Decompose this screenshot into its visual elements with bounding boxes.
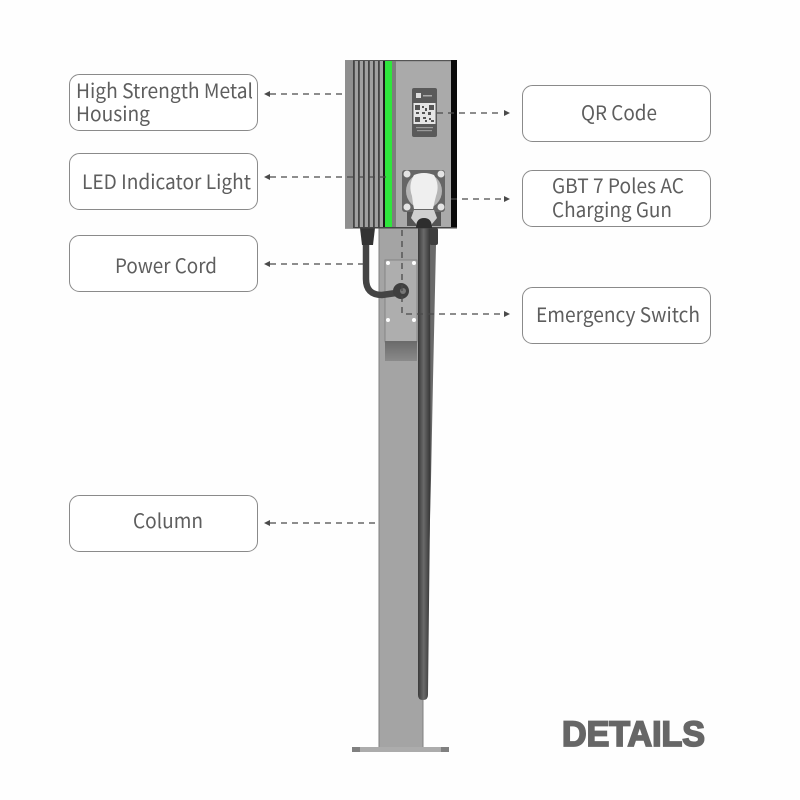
power cord: [360, 228, 409, 299]
charging cable: [418, 228, 438, 700]
label: QR code: QR Code: [581, 97, 657, 126]
charging socket: [402, 170, 445, 228]
label: emergency switch: [522, 288, 710, 344]
label: LED indicator light: LED Indicator Light: [82, 166, 251, 195]
label: GBT 7 poles AC charging gun: Charging Gun: [552, 194, 672, 223]
label: column: [70, 496, 258, 552]
label: GBT 7 poles AC charging gun: GBT 7 Poles AC: [552, 170, 684, 199]
label: emergency switch: Emergency Switch: [536, 299, 700, 328]
black side strip: [451, 60, 457, 227]
title: details: DETAILS: [562, 715, 705, 754]
housing heat-sink fins: [353, 61, 385, 227]
label: LED indicator light: [70, 154, 258, 210]
arrowheads: [264, 91, 510, 526]
LED indicator strip: [385, 61, 392, 227]
label: GBT 7 poles AC charging gun: [522, 170, 710, 226]
label: high strength metal housing: High Strength Metal: [76, 75, 253, 104]
label: power cord: [70, 236, 258, 292]
label: column: Column: [133, 505, 203, 534]
leader lines: [270, 94, 503, 523]
mounting plate: [385, 260, 417, 361]
label: high strength metal housing: Housing: [76, 98, 150, 127]
QR code panel: [412, 88, 437, 137]
column post: [352, 228, 449, 752]
label: QR code: [522, 86, 710, 142]
label: power cord: Power Cord: [115, 250, 217, 279]
label: high strength metal housing: [70, 74, 258, 130]
wallbox housing: [345, 60, 457, 228]
